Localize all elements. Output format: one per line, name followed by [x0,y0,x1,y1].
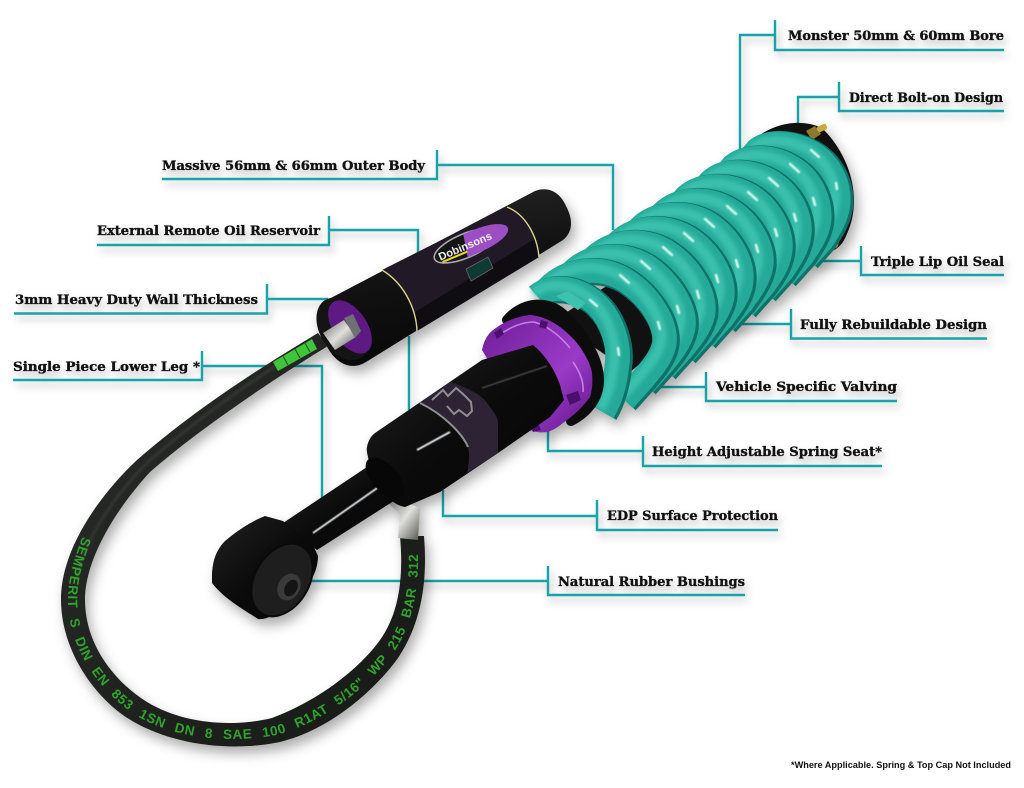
label: Triple Lip Oil Seal: Triple Lip Oil Seal [871,254,1004,270]
label: Vehicle Specific Valving: Vehicle Specific Valving [715,379,898,395]
hose [58,298,464,761]
reservoir small emblem [466,257,493,281]
label: Massive 56mm & 66mm Outer Body [162,150,613,230]
body logo [420,388,472,447]
callout labels [13,20,1004,595]
silver fitting [323,314,361,350]
reservoir purple tinted section [382,207,539,331]
label: Height Adjustable Spring Seat: Height Adjustable Spring Seat* [652,444,882,460]
top bolts [806,126,821,140]
reservoir bands [382,207,539,331]
first spring coil [534,286,619,413]
product: shock absorber [58,122,865,761]
footnote: *Where Applicable. Spring & Top Cap Not Included [791,760,1011,771]
label: Fully Rebuildable Design [725,309,987,338]
label: Fully Rebuildable Design: Fully Rebuildable Design [800,317,987,333]
purple height-adjust collar [482,315,592,432]
label: Height Adjustable Spring Seat [548,430,882,466]
label: Triple Lip Oil Seal [810,246,1004,275]
label: 3mm Heavy Duty Wall Thickness [14,284,328,314]
lower hose fitting [388,498,420,540]
lower spring seat ring [507,305,599,421]
reservoir logo [430,217,513,270]
label: Monster 50mm & 60mm Bore: Monster 50mm & 60mm Bore [788,28,1004,44]
hose green band [273,339,317,371]
hose printed text: SEMPERIT S DIN EN 853 1SN DN 8 SAE 100 R1AT 5/16" WP 215 BAR 312 [68,538,418,740]
neck collar [359,451,411,505]
purple tint band [420,382,498,473]
label: 3mm Heavy Duty Wall Thickness: 3mm Heavy Duty Wall Thickness [15,292,258,308]
label: Natural Rubber Bushings [308,566,745,595]
inner rod seen through coils [555,165,835,372]
spring coils [542,141,840,401]
top cap [745,123,854,253]
lower eye bushing [212,516,325,627]
label: Natural Rubber Bushings: Natural Rubber Bushings [558,574,745,590]
label: EDP Surface Protection [443,490,778,530]
body highlights [417,432,450,450]
label: Single Piece Lower Leg [13,351,322,498]
label: External Remote Oil Reservoir: External Remote Oil Reservoir [97,223,321,239]
purple end face [319,293,381,361]
eye centre bore [272,569,306,605]
label: Monster 50mm & 60mm Bore [740,20,1004,152]
label: Direct Bolt-on Design [798,82,1004,128]
label: Direct Bolt-on Design: Direct Bolt-on Design [849,90,1003,106]
label: EDP Surface Protection: EDP Surface Protection [607,508,778,524]
reservoir body [321,189,571,366]
label: Vehicle Specific Valving [638,372,898,401]
coil end tab [556,291,586,310]
main outer body [367,345,564,507]
leader: reservoir to body [408,336,410,410]
label: Massive 56mm & 66mm Outer Body: Massive 56mm & 66mm Outer Body [162,158,426,174]
rod [283,451,411,550]
reservoir [305,189,571,370]
eye front face [239,533,325,627]
reservoir end cap [305,288,381,370]
reservoir logo: Dobinsons [437,230,494,264]
label: Single Piece Lower Leg: Single Piece Lower Leg * [13,359,200,375]
label: External Remote Oil Reservoir [97,216,418,254]
